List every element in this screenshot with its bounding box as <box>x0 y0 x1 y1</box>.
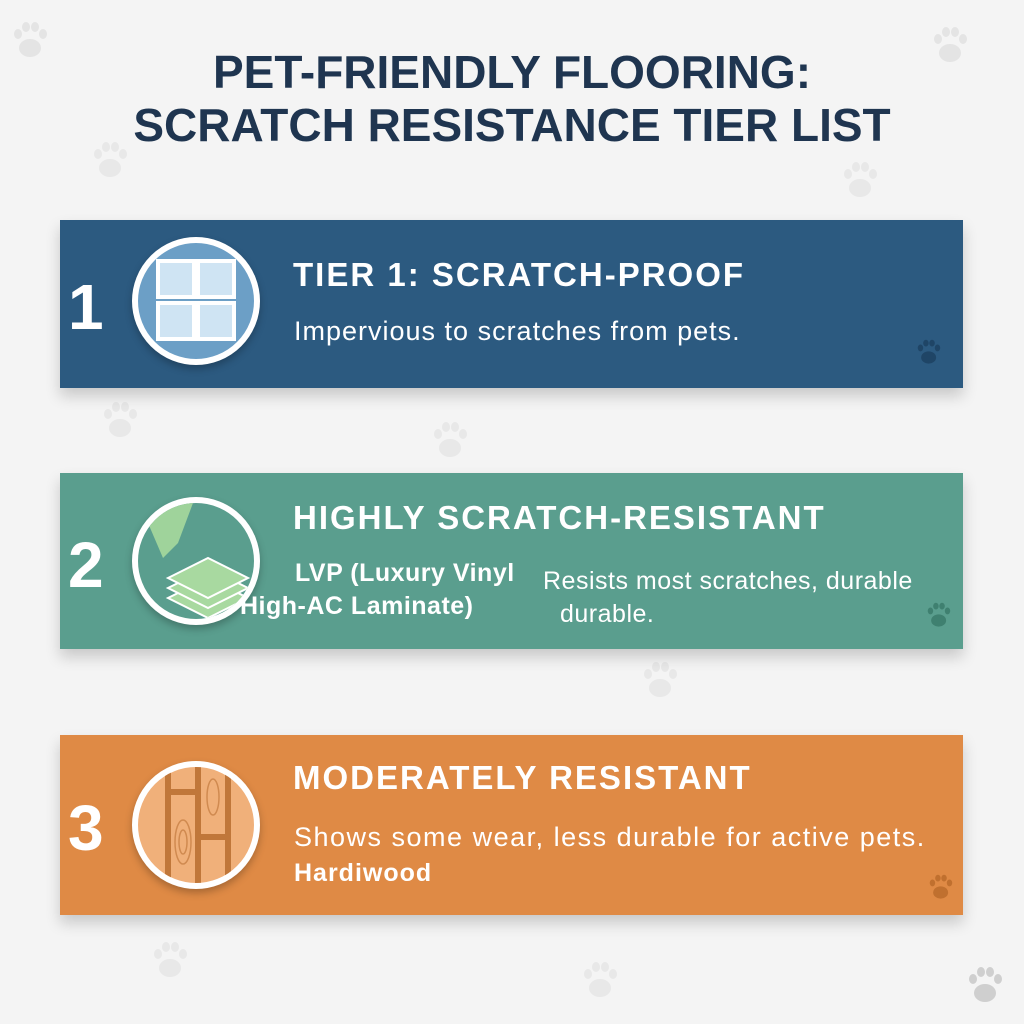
tier 2 material: LVP (Luxury Vinyl <box>295 559 515 587</box>
tier 1 description: Impervious to scratches from pets. <box>294 316 741 346</box>
icon: tile grid <box>132 237 260 365</box>
tier 2 number: 2 <box>68 529 104 601</box>
title: SCRATCH RESISTANCE TIER LIST <box>133 99 891 151</box>
icon: hardwood <box>132 761 260 889</box>
tier 2 material: High-AC Laminate) <box>240 592 474 620</box>
tier 2 description: durable. <box>560 600 654 628</box>
tier 2 description: Resists most scratches, durable <box>543 567 913 595</box>
tier 2 heading: HIGHLY SCRATCH-RESISTANT <box>293 499 826 536</box>
tier 2 description <box>543 567 913 628</box>
tier 3 heading: MODERATELY RESISTANT <box>293 759 752 796</box>
panel: tier 3 <box>60 735 963 915</box>
title <box>133 46 891 151</box>
tier 2 material <box>240 559 515 620</box>
tier 3 number: 3 <box>68 792 104 864</box>
panel: tier 2 <box>60 473 963 649</box>
icon: vinyl planks <box>132 497 260 625</box>
tier 1 heading: TIER 1: SCRATCH-PROOF <box>293 256 745 293</box>
tier 3 material: Hardiwood <box>294 859 432 887</box>
tier 1 number: 1 <box>68 271 104 343</box>
panel: tier 1 <box>60 220 963 388</box>
title: PET-FRIENDLY FLOORING: <box>213 46 811 98</box>
tier 3 description: Shows some wear, less durable for active pets. <box>294 822 926 852</box>
